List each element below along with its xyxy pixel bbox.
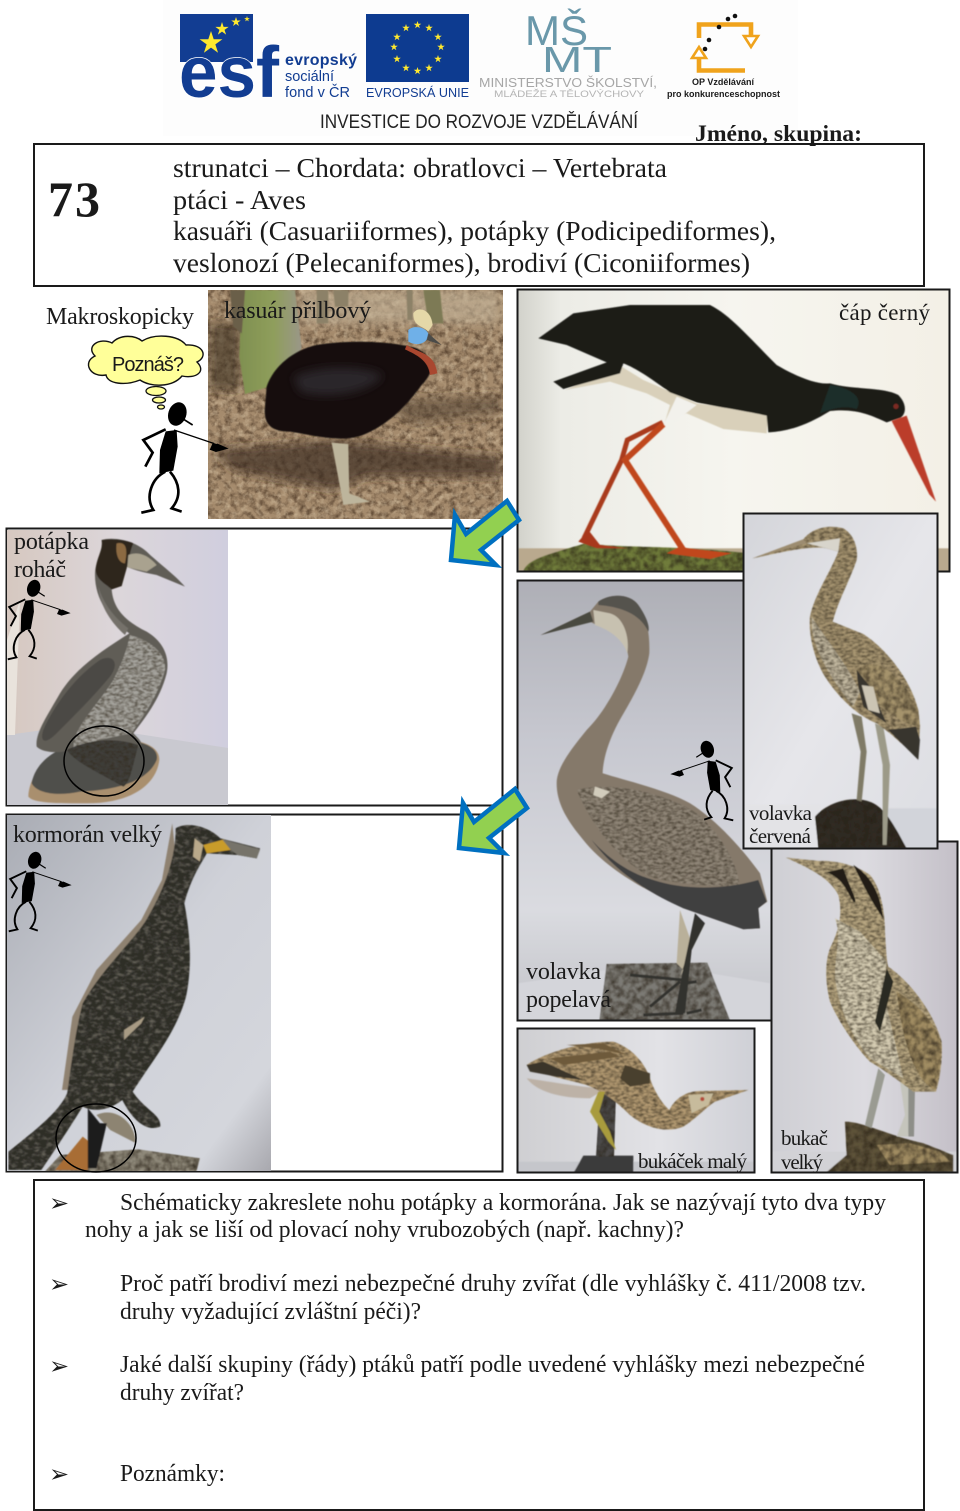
- notes: [49, 1460, 225, 1488]
- question 3: ➢: [49, 1352, 69, 1380]
- label: volavka červená: červená: [749, 824, 812, 848]
- panel: questions: [34, 1180, 924, 1510]
- logo: ESF: [179, 14, 357, 113]
- logo: OP Vzdělávání: [667, 14, 781, 100]
- logo: MŠMT: MT: [542, 39, 612, 80]
- photo: cassowary: [208, 290, 503, 519]
- leg highlight circle: [56, 1104, 136, 1172]
- panel: grebe: [6, 528, 502, 806]
- taxonomy text: ptáci - Aves: [173, 185, 306, 215]
- logo: OP Vzdělávání: pro konkurenceschopnost: [667, 89, 781, 100]
- question 2: druhy vyžadující zvláštní péči)?: [120, 1299, 421, 1325]
- question 1: ➢: [49, 1189, 69, 1217]
- banner caption: INVESTICE DO ROZVOJE VZDĚLÁVÁNÍ: [320, 111, 639, 133]
- question 2: ➢: [49, 1270, 69, 1298]
- logo: ESF: esf: [179, 33, 280, 113]
- photo: great cormorant: [7, 815, 271, 1172]
- logo: ESF: evropský: [285, 52, 357, 69]
- bubble text: Poznáš?: [112, 354, 184, 376]
- question 3: druhy zvířat?: [120, 1380, 244, 1406]
- photo: little bittern: [518, 1028, 755, 1173]
- label: potápka roháč: [14, 529, 89, 583]
- icon: pointing figure: [9, 850, 70, 931]
- panel: cormorant: [6, 814, 502, 1172]
- photo: purple heron: [744, 514, 938, 848]
- logo banner: [163, 0, 798, 136]
- question 3: Jaké další skupiny (řády) ptáků patří podle uvedené vyhlášky mezi nebezpečné: [120, 1352, 865, 1378]
- taxonomy text: kasuáři (Casuariiformes), potápky (Podicipediformes),: [173, 216, 776, 246]
- purple heron frame: [744, 514, 938, 848]
- photo: black stork: [518, 290, 952, 572]
- label: volavka červená: [749, 801, 813, 848]
- question 1: nohy a jak se liší od plovací nohy vrubozobých (např. kachny)?: [85, 1217, 684, 1243]
- arrow: to cormorant: [459, 789, 527, 853]
- thought bubble: [89, 336, 203, 409]
- taxonomy text: [173, 153, 776, 278]
- little bittern frame: [518, 1028, 754, 1172]
- icon: pointing figure: [8, 578, 69, 659]
- heron frame: [518, 580, 772, 1020]
- notes: Poznámky:: [120, 1461, 225, 1487]
- arrow: to grebe: [451, 501, 519, 565]
- bird body: [265, 342, 431, 439]
- question 3: [49, 1352, 865, 1406]
- label: volavka popelavá: volavka: [526, 959, 601, 985]
- label: bukač velký: [781, 1126, 828, 1174]
- question 1: [49, 1189, 886, 1243]
- logo: ESF: sociální: [285, 69, 334, 85]
- label: bukač velký: bukač: [781, 1126, 828, 1150]
- taxonomy text: strunatci – Chordata: obratlovci – Vertebrata: [173, 153, 667, 183]
- label: potápka roháč: potápka: [14, 529, 89, 555]
- logo: MŠMT: MLÁDEŽE A TĚLOVÝCHOVY: [494, 89, 645, 100]
- question 2: Proč patří brodiví mezi nebezpečné druhy zvířat (dle vyhlášky č. 411/2008 tzv.: [120, 1271, 866, 1297]
- label: bukač velký: velký: [781, 1150, 824, 1174]
- label: potápka roháč: roháč: [14, 557, 66, 583]
- notes: ➢: [49, 1460, 69, 1488]
- label: volavka popelavá: popelavá: [526, 987, 611, 1013]
- logo: ESF: fond v ČR: [285, 84, 350, 101]
- label: bukáček malý: bukáček malý: [638, 1149, 748, 1173]
- logo: EU flag: [366, 14, 469, 100]
- logo: MŠMT: MINISTERSTVO ŠKOLSTVÍ,: [479, 75, 657, 90]
- icon: pointing figure: [141, 400, 227, 513]
- label: čáp černý: čáp černý: [839, 300, 930, 325]
- chapter number: 73: [48, 171, 100, 227]
- logo: MŠMT: MŠ: [525, 7, 588, 54]
- label: kormorán velký: kormorán velký: [13, 822, 162, 848]
- photo: great crested grebe: [7, 530, 228, 805]
- logo: OP Vzdělávání: OP Vzdělávání: [692, 77, 754, 87]
- label: volavka popelavá: [526, 959, 611, 1013]
- label: kasuár přilbový: kasuár přilbový: [224, 298, 371, 324]
- logo: EU flag: EVROPSKÁ UNIE: [366, 85, 469, 100]
- panel: header box: [34, 144, 924, 286]
- question 1: Schématicky zakreslete nohu potápky a kormorána. Jak se nazývají tyto dva typy: [120, 1190, 886, 1216]
- stork frame: [518, 290, 950, 572]
- question 2: [49, 1270, 866, 1325]
- leg highlight circle: [64, 726, 144, 796]
- heading: Makroskopicky: Makroskopicky: [46, 304, 194, 330]
- bittern frame: [772, 842, 958, 1172]
- photo: great bittern: [772, 842, 958, 1174]
- taxonomy text: veslonozí (Pelecaniformes), brodiví (Ciconiiformes): [173, 248, 750, 278]
- name field label: Jméno, skupina:: [695, 121, 862, 147]
- icon: pointing figure, mirrored: [672, 739, 733, 820]
- logo: MŠMT: [479, 7, 657, 100]
- label: volavka červená: volavka: [749, 801, 813, 825]
- photo: grey heron: [518, 580, 772, 1020]
